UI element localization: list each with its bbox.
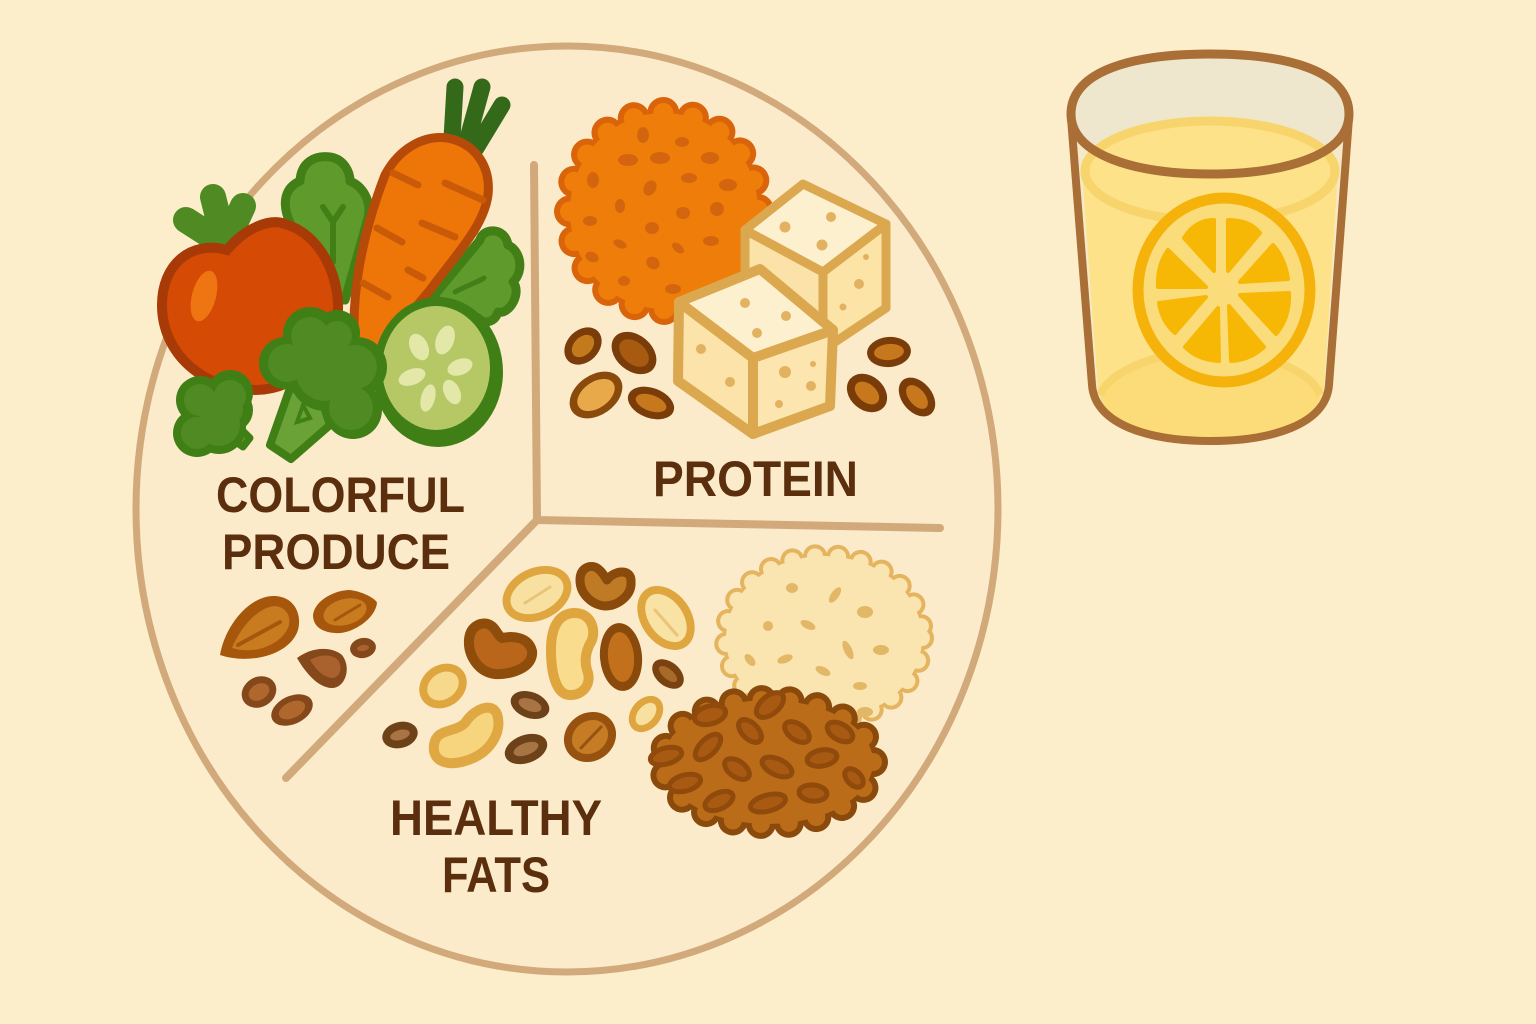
icon: glass of lemon water	[1071, 54, 1349, 441]
icon: back leafy green	[285, 157, 369, 300]
icon: protein beans	[557, 320, 943, 428]
panel: healthy fats	[379, 555, 922, 903]
icon: orange crumble patty	[570, 113, 758, 309]
label: colorful produce: COLORFUL	[216, 467, 465, 523]
panel: colorful produce	[162, 87, 520, 732]
icon: back tofu cube	[745, 184, 886, 350]
glass top opening	[1071, 54, 1349, 174]
icon: mixed nuts	[379, 555, 707, 772]
label: colorful produce: PRODUCE	[222, 524, 450, 580]
nuts under produce	[220, 590, 378, 732]
icon: large broccoli	[259, 307, 387, 459]
glass body	[1071, 114, 1349, 441]
label: healthy fats: FATS	[442, 847, 550, 903]
panel: protein	[557, 113, 943, 507]
icon: cucumber slice	[373, 297, 503, 447]
label: protein: PROTEIN	[653, 451, 858, 507]
glass outline	[1071, 54, 1349, 441]
label: colorful produce	[216, 467, 465, 580]
label: healthy fats: HEALTHY	[390, 790, 602, 846]
icon: small broccoli	[173, 370, 253, 457]
icon: carrot	[354, 87, 502, 350]
plate	[136, 46, 998, 972]
icon: brown crumble patty	[648, 688, 873, 824]
icon: right leafy green	[432, 231, 520, 322]
icon: tomato	[162, 197, 338, 390]
lemon slice	[1138, 198, 1310, 382]
icon: front tofu cube	[678, 269, 833, 434]
icon: cream crumble patty	[726, 556, 922, 720]
liquid	[1082, 121, 1338, 438]
label: healthy fats	[390, 790, 602, 903]
